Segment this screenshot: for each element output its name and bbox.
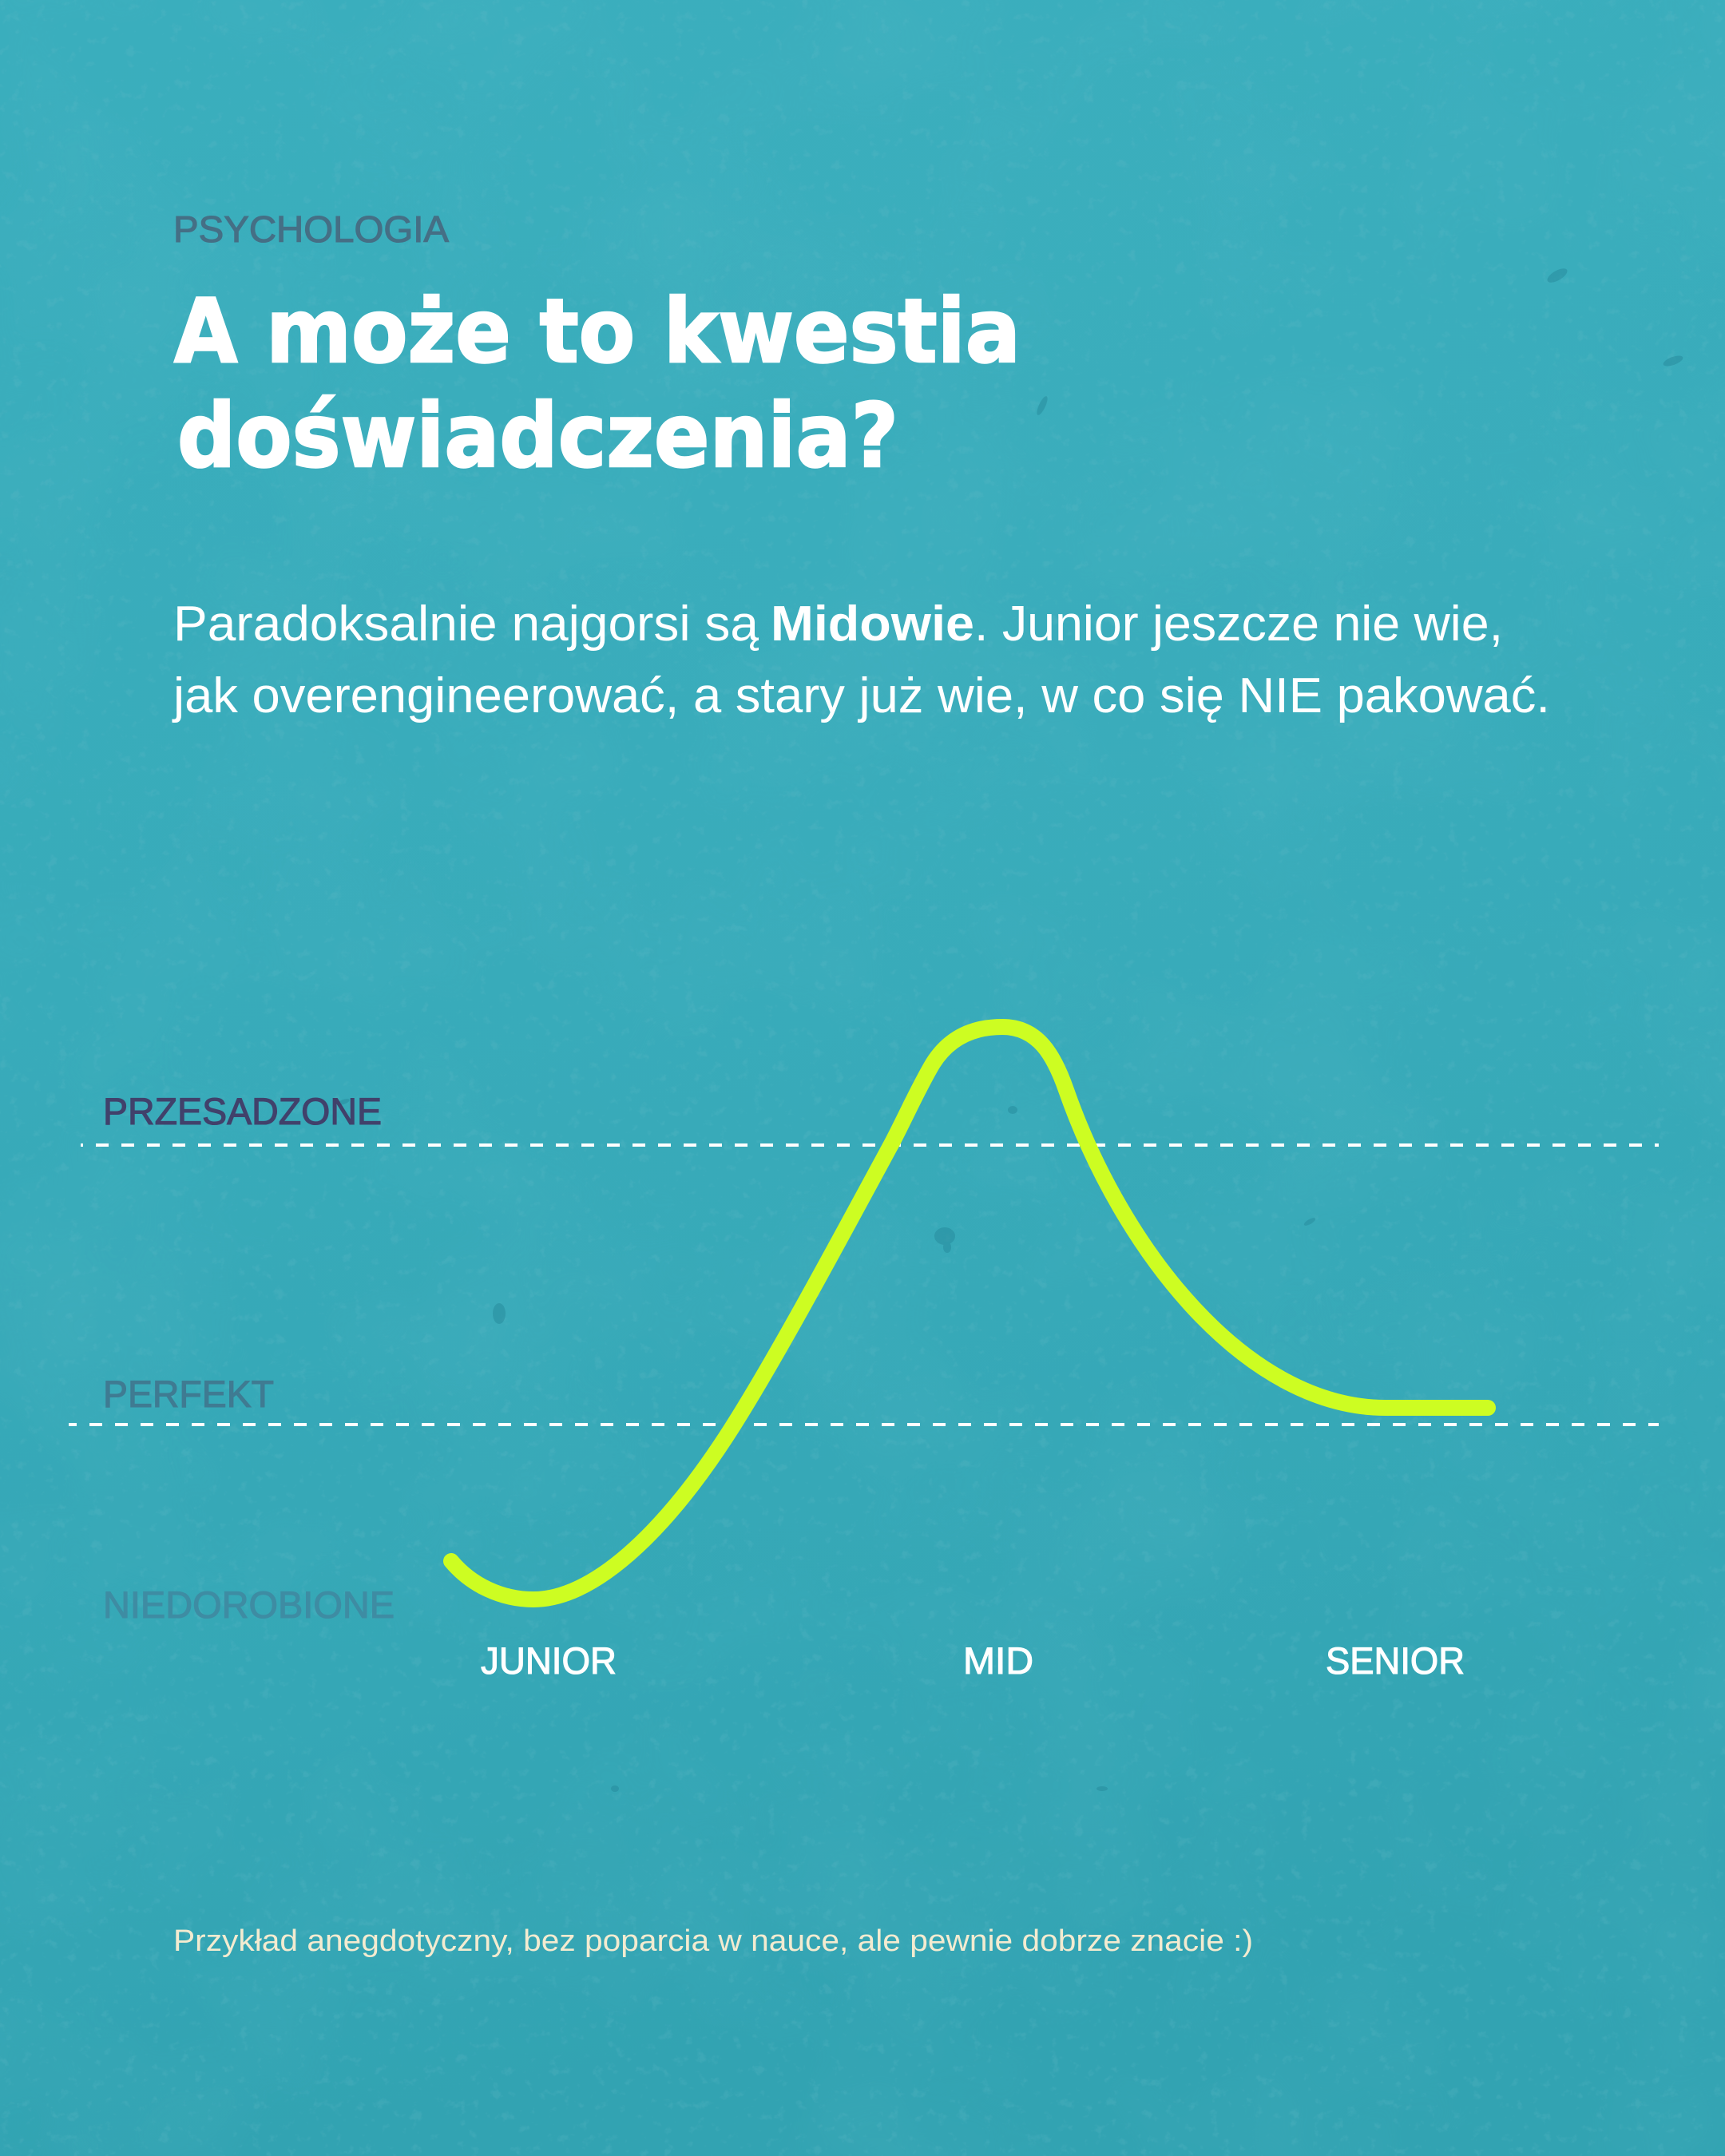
chart — [69, 1027, 1659, 1682]
intro paragraph: . Junior jeszcze nie wie, — [974, 596, 1503, 652]
axis label: SENIOR: SENIOR — [1326, 1639, 1465, 1682]
title — [174, 280, 1021, 488]
intro paragraph — [172, 596, 1550, 723]
section label: PSYCHOLOGIA: PSYCHOLOGIA — [173, 208, 449, 250]
axis label: MID: MID — [963, 1639, 1033, 1682]
level label: NIEDOROBIONE: NIEDOROBIONE — [103, 1583, 395, 1626]
intro paragraph: Midowie — [771, 596, 974, 652]
experience curve — [451, 1027, 1488, 1599]
title: A może to kwestia — [174, 280, 1021, 383]
level label: PERFEKT: PERFEKT — [103, 1373, 274, 1415]
level label: PRZESADZONE: PRZESADZONE — [103, 1090, 382, 1132]
footnote: Przykład anegdotyczny, bez poparcia w nauce, ale pewnie dobrze znacie :) — [173, 1924, 1253, 1958]
axis label: JUNIOR: JUNIOR — [481, 1639, 617, 1682]
title: doświadczenia? — [177, 385, 898, 488]
intro paragraph: Paradoksalnie najgorsi są — [173, 596, 759, 652]
intro paragraph: jak overengineerować, a stary już wie, w co się NIE pakować. — [172, 668, 1550, 723]
dashed threshold lines — [69, 1145, 1659, 1425]
